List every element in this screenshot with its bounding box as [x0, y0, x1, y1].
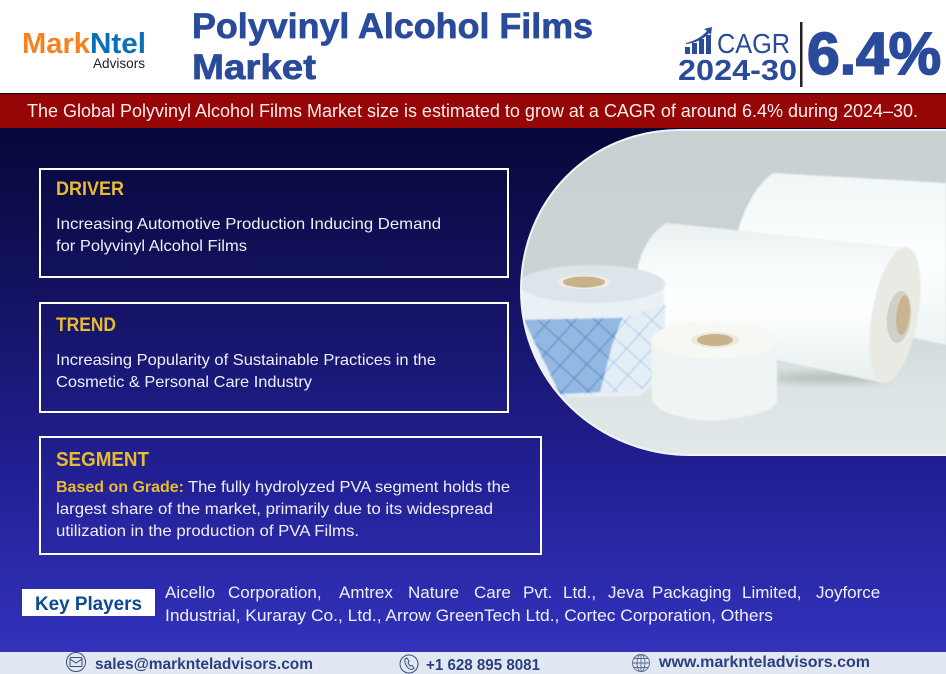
key players list: Aicello [165, 583, 215, 602]
key players list: Corporation, [228, 583, 322, 602]
key players list: Joyforce [816, 583, 880, 602]
driver text: Increasing Automotive Production Inducing Demand [56, 216, 441, 233]
segment text [56, 479, 510, 540]
trend text [56, 352, 436, 391]
key players label [22, 589, 155, 616]
photo: rolls of film [515, 128, 946, 458]
footer email: sales@marknteladvisors.com [95, 656, 313, 673]
icon: globe [632, 654, 650, 672]
segment heading: SEGMENT [56, 449, 149, 471]
logo: MarkNtel Advisors [22, 28, 146, 71]
left printed roll [521, 284, 664, 397]
title: Market [192, 48, 316, 87]
small front roll [651, 340, 777, 421]
key players list: Pvt. [523, 583, 552, 602]
key players list: Nature [408, 583, 459, 602]
key players list: Care [474, 583, 511, 602]
summary banner [0, 93, 946, 128]
key players list: Industrial, Kuraray Co., Ltd., Arrow GreenTech Ltd., Cortec Corporation, Others [165, 606, 773, 625]
driver text: for Polyvinyl Alcohol Films [56, 238, 247, 255]
key players label: Key Players [35, 594, 142, 615]
trend text: Cosmetic & Personal Care Industry [56, 374, 312, 391]
icon: growth chart [685, 27, 712, 54]
driver text [56, 216, 441, 255]
title: Polyvinyl Alcohol Films [192, 7, 593, 46]
key players list: Jeva [608, 583, 644, 602]
icon: mail [66, 652, 86, 672]
back roll [738, 173, 946, 345]
CAGR period: 2024-30 [678, 55, 797, 87]
segment text: The fully hydrolyzed PVA segment holds the [188, 479, 510, 496]
key players list [165, 583, 880, 625]
footer bar [0, 652, 946, 674]
trend text: Increasing Popularity of Sustainable Practices in the [56, 352, 436, 369]
segment text: Based on Grade: [56, 479, 184, 496]
panel: trend [40, 303, 508, 412]
panel: driver [40, 169, 508, 277]
CAGR label: CAGR [717, 28, 790, 59]
header background [0, 0, 946, 93]
key players list: Limited, [742, 583, 802, 602]
trend heading: TREND [56, 315, 116, 336]
key players list: Ltd., [563, 583, 596, 602]
panel: segment [40, 437, 541, 554]
title [192, 7, 593, 87]
segment text: utilization in the production of PVA Films. [56, 523, 359, 540]
icon: phone [400, 655, 418, 673]
key players list: Amtrex [339, 583, 393, 602]
footer phone: +1 628 895 8081 [426, 657, 540, 674]
driver heading: DRIVER [56, 179, 124, 200]
footer website: www.marknteladvisors.com [658, 654, 870, 671]
middle roll [637, 223, 907, 383]
main gradient background [0, 128, 946, 652]
CAGR block [678, 21, 941, 87]
logo: MarkNtel Advisors: Ntel [90, 28, 146, 60]
segment text: largest share of the market, primarily due to its widespread [56, 501, 493, 518]
logo: MarkNtel Advisors: Mark [22, 28, 91, 60]
CAGR value: 6.4% [807, 21, 941, 87]
key players list: Packaging [652, 583, 731, 602]
summary banner: The Global Polyvinyl Alcohol Films Market size is estimated to grow at a CAGR of around 6.4% during 2024–30. [27, 101, 918, 121]
logo: MarkNtel Advisors: Advisors [93, 55, 145, 71]
